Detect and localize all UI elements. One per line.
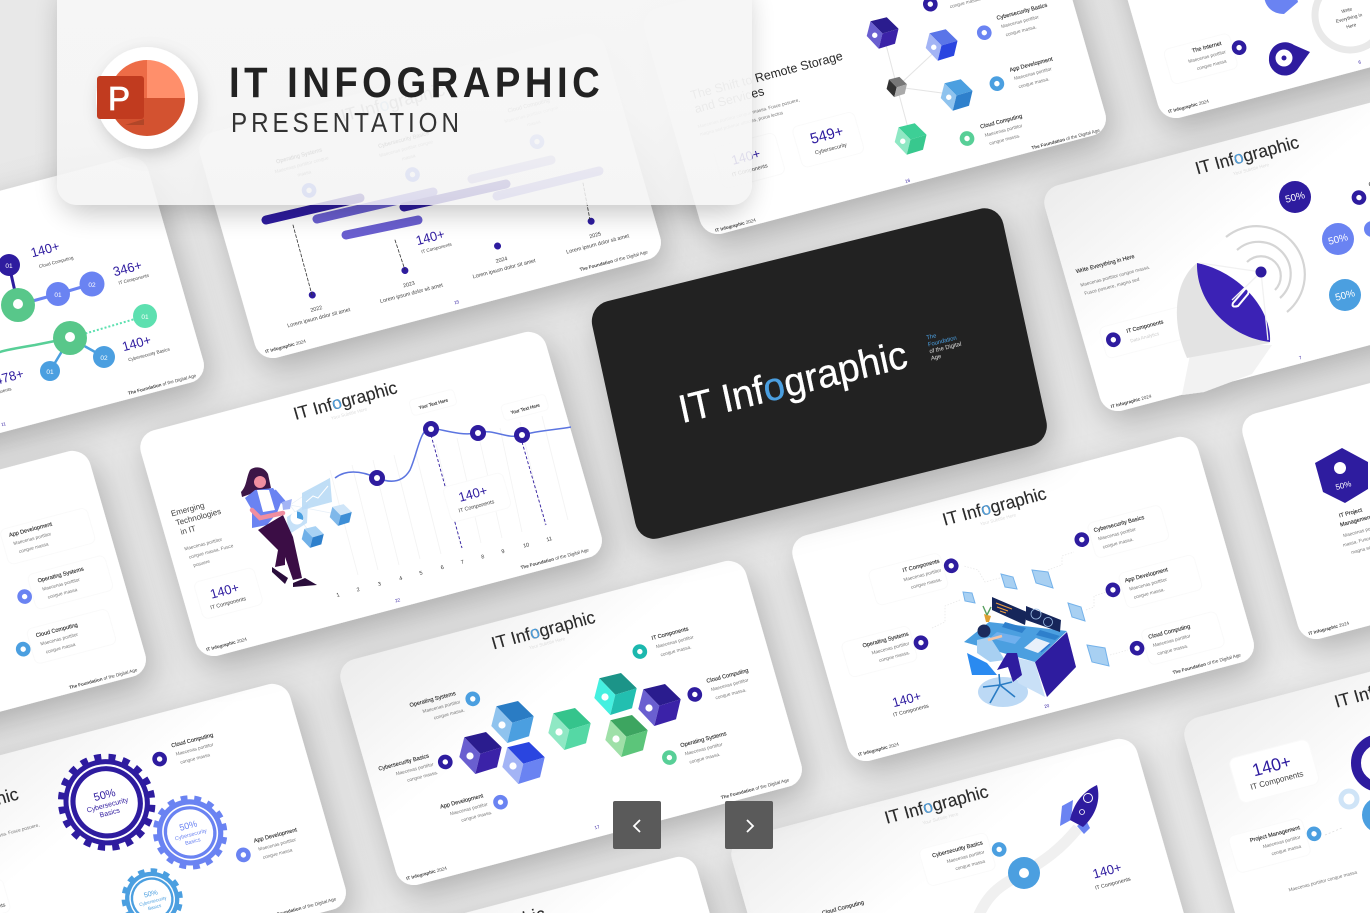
slide footer: IT Infographic 2024: [1308, 621, 1350, 636]
text in ring: Write: [1341, 6, 1353, 14]
illustration: developer at desk: [932, 552, 1128, 707]
PowerPoint logo: [96, 47, 198, 149]
tagline: The: [926, 333, 938, 342]
stat: IT Components: 346+: [111, 257, 144, 279]
text block: [1334, 502, 1370, 556]
card: Cybersecurity Basics: Cybersecurity Basics: [1093, 515, 1145, 534]
card: App Development: congue massa: [18, 541, 49, 554]
heading: Emerging Technologies: in IT: [179, 524, 197, 537]
topic: Cloud Computing: Maecenas porttitor: [175, 742, 214, 757]
text in ring: Here: [1346, 22, 1357, 30]
text block: Maecenas porttitor congue massa.: [1080, 265, 1151, 288]
card: IT Components: Maecenas porttitor: [903, 568, 942, 582]
slide footer: IT Infographic 2024: [265, 339, 307, 354]
stat card: 140+: [1250, 751, 1293, 780]
subtitle: PRESENTATION: [231, 109, 459, 138]
slide footer: IT Infographic 2024: [715, 217, 757, 233]
stat: IT Components: 140+: [414, 226, 446, 248]
slide footer: 20: [1044, 703, 1050, 709]
node network: 02: [100, 355, 108, 362]
percent circles: 50%: [1284, 190, 1306, 206]
card: App Development: App Development: [8, 522, 53, 539]
slide title: IT Infographic: [489, 607, 598, 653]
topic: Cloud Computing: congue massa.: [715, 687, 747, 700]
axis numbers: 3: [377, 581, 382, 588]
slide: emerging technologies chart: [136, 328, 606, 660]
body text: [184, 534, 237, 569]
icon: location pin: [1269, 42, 1310, 75]
stat: IT Components left: [0, 366, 27, 399]
text in ring: [1333, 4, 1365, 32]
slide footer: 22: [394, 597, 401, 603]
topic: Cloud Computing: [501, 96, 567, 153]
card: Cloud Computing: congue massa.: [1157, 643, 1189, 656]
card: Cybersecurity Basics: congue massa: [955, 859, 986, 871]
card: Cloud Computing: [1128, 611, 1226, 669]
gear: small: 50%: [143, 889, 159, 900]
timeline years: 2022: [310, 305, 323, 314]
gantt bars: [266, 160, 599, 295]
stat card: Cybersecurity: Cybersecurity: [814, 142, 848, 157]
slide: project management hexagon: [1238, 311, 1370, 643]
topic: Cybersecurity Basics: [376, 130, 442, 186]
slide: internet pin and ring: [1098, 0, 1370, 122]
card: Cloud Computing: Maecenas porttitor: [40, 632, 79, 646]
topic: Cloud Computing: congue massa: [180, 752, 211, 765]
card: Operating Systems: congue massa: [47, 587, 78, 600]
slide footer: IT Infographic 2024: [406, 866, 448, 881]
text block: Fusce posuere, magna sed: [1084, 277, 1140, 296]
gear: small: Basics: [147, 903, 162, 911]
slide heading: and Services: [693, 84, 766, 116]
percent circles: 50%: [1334, 288, 1356, 304]
slide footer: 15: [453, 299, 460, 305]
topic: Operating Systems: Maecenas porttitor: [684, 742, 724, 756]
slide footer: IT Infographic 2024: [206, 637, 248, 652]
icon: rocket: [1060, 785, 1098, 834]
topic: Cybersecurity Basics: Cybersecurity Basics: [378, 131, 430, 150]
stat: Cloud Computing: [29, 236, 74, 270]
gear: small: [117, 865, 187, 913]
topic: Cloud Computing: [151, 733, 219, 771]
topic: IT Components: Maecenas porttitor: [655, 634, 695, 649]
slide title: IT Infographic: [1193, 132, 1301, 178]
topic: Operating Systems: [661, 731, 732, 770]
topic: Cloud Computing: Maecenas porttitor: [710, 677, 750, 692]
topic: Cloud Computing: Cloud Computing: [171, 733, 214, 749]
axis numbers: 6: [440, 565, 445, 571]
card: Project Management: congue massa: [1271, 844, 1302, 856]
slide subtitle: Your Subtitle Here: [1232, 162, 1270, 176]
gear: medium: Basics: [184, 837, 202, 847]
stat: [1089, 858, 1132, 892]
node network: 01: [141, 314, 149, 321]
arrow button: next: [725, 801, 773, 849]
topic: Cybersecurity Basics: Maecenas porttitor congue: [379, 139, 434, 158]
topic: Cloud Computing: [959, 114, 1028, 152]
timeline years: 2024: [495, 256, 508, 265]
topic: Cloud Computing: massa: [526, 119, 541, 127]
slide footer: The Foundation of the Digital Age: [579, 249, 649, 272]
callout: Your Text Here: [409, 389, 457, 416]
tagline: of the Digital: [929, 342, 962, 355]
cube network: [867, 17, 973, 155]
percent circles: 50%: [1327, 232, 1349, 248]
timeline years: Lorem ipsum dolor sit amet: [472, 258, 537, 280]
card: IT Components: IT Components: [1126, 319, 1164, 335]
slide: rocket: [727, 735, 1197, 913]
card: Cybersecurity Basics: Maecenas porttitor: [1098, 527, 1137, 541]
card: The Internet: The Internet: [1192, 41, 1223, 55]
slide footer: The Foundation of the Digital Age: [127, 373, 197, 396]
card: App Development: Maecenas porttitor: [13, 531, 52, 546]
stat card: IT Components: [712, 132, 786, 189]
topic: App Development: [235, 827, 303, 866]
topic: Operating Systems: Operating Systems: [680, 731, 728, 749]
card: IT Components: Data Analytics: [1130, 331, 1160, 343]
axis numbers: 4: [399, 576, 403, 582]
node network: 01: [5, 263, 13, 270]
node network: 02: [88, 282, 96, 289]
card: App Development: App Development: [1124, 567, 1169, 584]
slide footer: [715, 127, 1101, 234]
topic: Cloud Computing: congue massa.: [989, 133, 1021, 146]
slide footer: [206, 546, 590, 653]
card: Cloud Computing: Cloud Computing: [35, 622, 79, 639]
card: Project Management: Maecenas porttitor: [1262, 834, 1302, 849]
card: Operating Systems: Operating Systems: [37, 566, 85, 584]
topic: Cybersecurity Basics: congue massa.: [407, 770, 439, 783]
slide: hexagon cubes: [336, 557, 806, 889]
percent circles: [1279, 181, 1370, 311]
title: IT INFOGRAPHIC: [229, 58, 600, 106]
slide title: IT Infographic: [291, 377, 400, 424]
topic: Cybersecurity Basics: [976, 3, 1053, 44]
stat: IT Components: [111, 256, 150, 286]
slide footer: 17: [594, 824, 601, 830]
slide subtitle: Your Subtitle Here: [528, 636, 566, 650]
slide subtitle: Your Subtitle Here: [980, 512, 1017, 527]
topic: App Development: App Development: [1009, 56, 1054, 74]
topic: Cybersecurity Basics: massa: [401, 153, 416, 161]
card: Operating Systems: [1351, 170, 1370, 210]
stat card: IT Components: [1249, 769, 1304, 792]
stat: Cybersecurity Basics: Cybersecurity Basics: [128, 346, 171, 362]
slide: bottom partial title: [287, 853, 757, 913]
tagline: Age: [930, 354, 943, 362]
card: The Internet: congue massa: [1196, 58, 1227, 71]
stat card: Cybersecurity: [791, 111, 865, 168]
axis numbers: [336, 536, 553, 599]
slide: left list: [0, 447, 150, 779]
callout: 140+ IT Components: 140+: [457, 483, 489, 505]
card: The Internet: Maecenas porttitor: [1188, 49, 1227, 64]
stat card: IT Components: [210, 596, 247, 611]
stat: IT Components: [414, 225, 453, 255]
callout: Your Text Here: Your Text Here: [510, 403, 541, 415]
stat: 140+: [890, 688, 923, 710]
slide: timeline gantt (behind glass panel): [195, 30, 665, 362]
gears partial: [1325, 739, 1370, 835]
satellite dish illustration: [1177, 226, 1305, 395]
arrow button: previous: [613, 801, 661, 849]
timeline years: [280, 209, 631, 329]
hexagon 50%: [1315, 448, 1368, 503]
gear: medium: 50%: [178, 819, 198, 833]
callout: 140+ IT Components: [442, 472, 512, 523]
PowerPoint logo: P: [108, 80, 130, 117]
gear: medium: Cybersecurity: [174, 828, 208, 842]
slide footer: 7: [1298, 355, 1303, 360]
axis numbers: 7: [460, 559, 465, 566]
dark title slide: [588, 204, 1051, 543]
slide: desk illustration: [788, 433, 1258, 765]
topic: Cloud Computing: Cloud Computing: [706, 668, 749, 685]
card: Operating Systems: Maecenas porttitor: [42, 577, 81, 592]
stat: IT Components: IT Components: [421, 241, 453, 254]
axis numbers: 10: [523, 542, 530, 550]
stat: [0, 878, 11, 913]
topic: Cybersecurity Basics: Cybersecurity Basics: [996, 3, 1048, 22]
stat card: [1228, 738, 1320, 804]
topic: Cloud Computing: Maecenas porttitor: [984, 123, 1023, 138]
slide footer: IT Infographic 2024: [1168, 99, 1210, 114]
topic: Cybersecurity Basics: Maecenas porttitor: [395, 762, 435, 776]
axis numbers: 11: [546, 536, 553, 543]
card: Cybersecurity Basics: Cybersecurity Basics: [932, 840, 984, 859]
topic: App Development: Maecenas porttitor: [258, 837, 297, 852]
card: IT Components: [868, 549, 962, 606]
topic: App Development: congue massa.: [1018, 76, 1050, 89]
stat: Cybersecurity Basics: [120, 328, 171, 363]
callout: Your Text Here: Your Text Here: [418, 398, 449, 410]
text block: IT Project: [1338, 507, 1363, 519]
topic: Operating Systems: Operating Systems: [409, 691, 457, 709]
stat card: IT Components: 140+: [730, 146, 762, 168]
stat: Cloud Computing: 140+: [29, 238, 61, 260]
slide: gears and project management: [1180, 615, 1370, 913]
slide footer: IT Infographic 2024: [1110, 394, 1152, 409]
topic: App Development: App Development: [253, 827, 298, 845]
slide footer: 6: [1358, 59, 1362, 65]
line chart: [330, 416, 571, 575]
callout: 140+ IT Components: IT Components: [458, 499, 495, 514]
rocket path: [975, 828, 1078, 913]
card: Operating Systems: congue massa.: [878, 650, 910, 663]
card: Project Management: Project Management: [1249, 825, 1301, 844]
card: Cloud Computing: congue massa: [45, 642, 76, 654]
gear: large: 50%: [92, 787, 117, 804]
card: IT Components: [1099, 306, 1190, 359]
card: Operating Systems: [14, 555, 114, 613]
topic: Operating Systems: [409, 686, 481, 725]
illustration: woman with tablet: [241, 467, 352, 587]
body text: Maecenas porttitor congue massa. Fusce posuere,: [697, 97, 800, 129]
body text: Maecenas porttitor: [184, 537, 223, 551]
topic: Cybersecurity Basics: Maecenas porttitor: [1001, 14, 1040, 29]
heading: Emerging Technologies: Technologies: [175, 507, 222, 527]
topic: App Development: congue massa.: [461, 810, 493, 823]
topic: Cybersecurity Basics: Cybersecurity Basics: [378, 753, 430, 773]
tagline: [926, 328, 964, 362]
stat card: Cybersecurity: 549+: [808, 123, 846, 148]
topic: Cybersecurity Basics: [378, 749, 453, 789]
slide: left green nodes: [0, 153, 208, 485]
slide footer: IT Infographic 2024: [858, 742, 900, 757]
topic: Cybersecurity Basics: congue massa.: [1005, 24, 1037, 37]
ring: [1315, 0, 1370, 50]
topic: Operating Systems: massa: [297, 169, 312, 178]
axis numbers: 9: [501, 549, 505, 555]
icon: top pin: [1264, 0, 1298, 14]
topic: Operating Systems: congue massa.: [689, 752, 721, 765]
hexagon 50%: 50%: [1335, 479, 1352, 492]
dark slide title: IT Infographic: [675, 333, 911, 432]
slide: gears: [0, 680, 350, 913]
topic: Operating Systems: Operating Systems: [276, 147, 323, 165]
tagline: Foundation: [927, 335, 957, 349]
timeline years: Lorem ipsum dolor sit amet: [287, 307, 352, 329]
slide footer: [405, 774, 790, 883]
text block: Write Everything in Here: [1075, 254, 1135, 275]
timeline years: Lorem ipsum dolor sit amet: [566, 233, 631, 256]
slide title: IT Infographic: [339, 79, 447, 126]
node network: [0, 254, 157, 381]
stat: 140+: [1091, 860, 1123, 882]
timeline years: 2025: [589, 231, 602, 240]
card: Cybersecurity Basics: Maecenas porttitor: [946, 849, 985, 864]
slide footer: [1168, 58, 1362, 115]
slide footer: The Foundation of the Digital Age: [1031, 128, 1101, 150]
body text: congue massa. Fusce: [188, 543, 234, 560]
gear: small: Cybersecurity: [139, 895, 168, 907]
axis numbers: 1: [336, 592, 340, 599]
gear: large: Cybersecurity: [86, 797, 130, 814]
slide: cubes and remote storage: [640, 0, 1110, 238]
stat: [888, 687, 930, 719]
card: The Internet: [1163, 30, 1249, 85]
axis numbers: 8: [481, 554, 485, 561]
card: Operating Systems: [841, 622, 930, 678]
slide footer: [858, 651, 1242, 758]
topic: Cloud Computing: [687, 668, 754, 706]
slide footer: [265, 248, 649, 355]
body text: magna sed pulvinar ultricies, purus lectus: [699, 110, 784, 137]
topic: App Development: Maecenas porttitor: [1013, 66, 1053, 81]
card: Operating Systems: Operating Systems: [862, 631, 910, 649]
card: Operating Systems: Maecenas porttitor: [871, 641, 910, 655]
card: App Development: [1104, 554, 1203, 612]
heading: Emerging Technologies: Emerging: [170, 501, 205, 518]
card: Cloud Computing: Maecenas porttitor: [1152, 633, 1191, 648]
topic: Operating Systems: [922, 0, 993, 15]
heading: Emerging Technologies: [170, 497, 225, 538]
text block: [1075, 251, 1153, 297]
body text: posuere: [193, 559, 211, 568]
gear: large: [51, 747, 163, 857]
slide heading: The Shift to Remote Storage: [689, 49, 844, 102]
slide footer: The Foundation of the Digital Age: [1172, 652, 1242, 675]
topic: Operating Systems: Maecenas porttitor: [422, 699, 461, 714]
card: Cloud Computing: Cloud Computing: [1148, 624, 1191, 641]
text line: Maecenas porttitor congue massa: [1288, 870, 1358, 892]
stat: IT Components: IT Components: [118, 273, 150, 286]
topic: App Development: [440, 788, 508, 827]
gear: medium: [147, 790, 233, 875]
node network: 01: [54, 292, 62, 299]
slide: satellite dish: [1040, 83, 1370, 415]
slide footer: [1110, 354, 1303, 410]
card: App Development: [0, 507, 96, 565]
glass header panel: [57, 0, 752, 212]
card: IT Components: IT Components: [902, 559, 941, 574]
stat: IT Components: [893, 703, 930, 719]
stat: IT Components: [1094, 876, 1132, 892]
stat: Cybersecurity Basics: 140+: [120, 332, 153, 354]
node network: 01: [46, 369, 54, 376]
axis numbers: 2: [356, 587, 361, 594]
axis numbers: 5: [419, 570, 423, 577]
slide footer: The Foundation of the Digital Age: [520, 547, 590, 570]
topic: Operating Systems: [272, 146, 338, 202]
card: App Development: Maecenas porttitor: [1129, 577, 1168, 592]
slide footer: The Foundation of the Digital Age: [68, 667, 138, 690]
slide title: IT Infographic: [882, 781, 991, 828]
topic: App Development: congue massa: [262, 847, 293, 860]
card: Project Management: [1228, 814, 1324, 874]
slide footer: [1, 371, 197, 429]
stat: Cloud Computing: Cloud Computing: [38, 255, 74, 269]
hexagon cube cluster: [459, 673, 681, 784]
slide footer: 16: [904, 178, 911, 184]
card: App Development: congue massa.: [1133, 587, 1165, 600]
card: Cybersecurity Basics: congue massa.: [1102, 537, 1134, 550]
stat card: IT Components: IT Components: [731, 163, 769, 178]
topic: App Development: Maecenas porttitor: [449, 802, 489, 816]
card: Cybersecurity Basics: [918, 829, 1009, 887]
topic: Operating Systems: Maecenas porttitor congue: [274, 155, 329, 174]
topic: IT Components: congue massa.: [660, 644, 692, 657]
card: Cybersecurity Basics: [1073, 504, 1170, 562]
topic: App Development: App Development: [440, 793, 485, 811]
timeline years: 2023: [402, 281, 416, 289]
card: Cloud Computing: [13, 608, 117, 668]
gear: large: Basics: [99, 807, 121, 819]
slide subtitle: Your Subtitle Here: [330, 406, 368, 421]
slide footer: 11: [1, 421, 7, 427]
topic: Cloud Computing: Maecenas porttitor congue: [504, 105, 559, 124]
topic: IT Components: IT Components: [651, 626, 690, 642]
timeline years: Lorem ipsum dolor sit amet: [379, 282, 444, 305]
slide title: IT Infographic: [940, 483, 1049, 530]
slide footer: The Foundation of the Digital Age: [720, 777, 790, 800]
text in ring: Everything in: [1335, 12, 1363, 24]
slide subtitle: Your Subtitle Here: [922, 811, 959, 826]
topic: IT Components: [632, 626, 697, 664]
topic: Operating Systems: congue massa.: [433, 707, 465, 720]
stat card: 140+: [208, 580, 241, 602]
stat card: [193, 567, 264, 620]
callout: Your Text Here: [500, 394, 549, 421]
topic: Cloud Computing: Cloud Computing: [980, 114, 1023, 131]
topic: App Development: [989, 56, 1059, 96]
topic: Cloud Computing: Cloud Computing: [507, 98, 551, 115]
card: IT Components: congue massa.: [910, 577, 942, 590]
